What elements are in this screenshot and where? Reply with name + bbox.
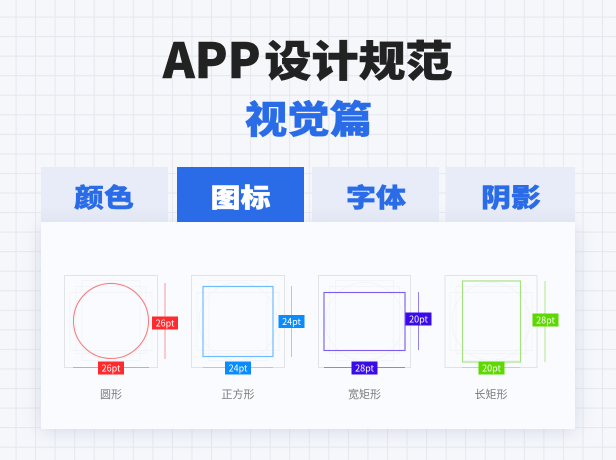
icon spec: circle: 26pt	[102, 362, 121, 374]
tab: 图标 (active): 图标	[211, 177, 270, 215]
icon spec: tall rectangle: 28pt	[536, 314, 556, 326]
tab: 图标 (active)	[177, 167, 304, 222]
icon spec: square: 24pt	[229, 362, 248, 374]
icon spec: square: 正方形	[222, 386, 254, 402]
icon spec: tall rectangle: 长矩形	[474, 386, 508, 402]
icon spec: tall rectangle: 20pt	[482, 362, 502, 374]
icon spec: circle: 26pt	[156, 316, 175, 330]
panel: content card	[41, 222, 575, 431]
tab: 阴影	[446, 167, 575, 222]
icon spec: square: 24pt	[282, 315, 302, 328]
tab: 阴影: 阴影	[481, 177, 541, 215]
icon spec: wide rectangle: 20pt	[409, 312, 429, 326]
icon spec: wide rectangle	[318, 276, 432, 402]
tab: 字体	[312, 167, 439, 222]
icon spec: circle	[64, 276, 178, 402]
icon spec: circle: 圆形	[100, 386, 122, 402]
title	[162, 22, 453, 92]
icon spec: wide rectangle: 28pt	[355, 362, 375, 374]
subtitle: 视觉篇	[245, 89, 372, 144]
title: APP	[162, 22, 261, 92]
title: 设计规范	[265, 27, 453, 89]
tab: 颜色: 颜色	[74, 177, 134, 215]
icon spec: wide rectangle: 宽矩形	[348, 386, 381, 402]
icon spec: tall rectangle	[445, 276, 558, 402]
tab: 字体: 字体	[346, 177, 407, 215]
icon spec: square	[192, 276, 304, 402]
tab: 颜色	[41, 167, 168, 222]
